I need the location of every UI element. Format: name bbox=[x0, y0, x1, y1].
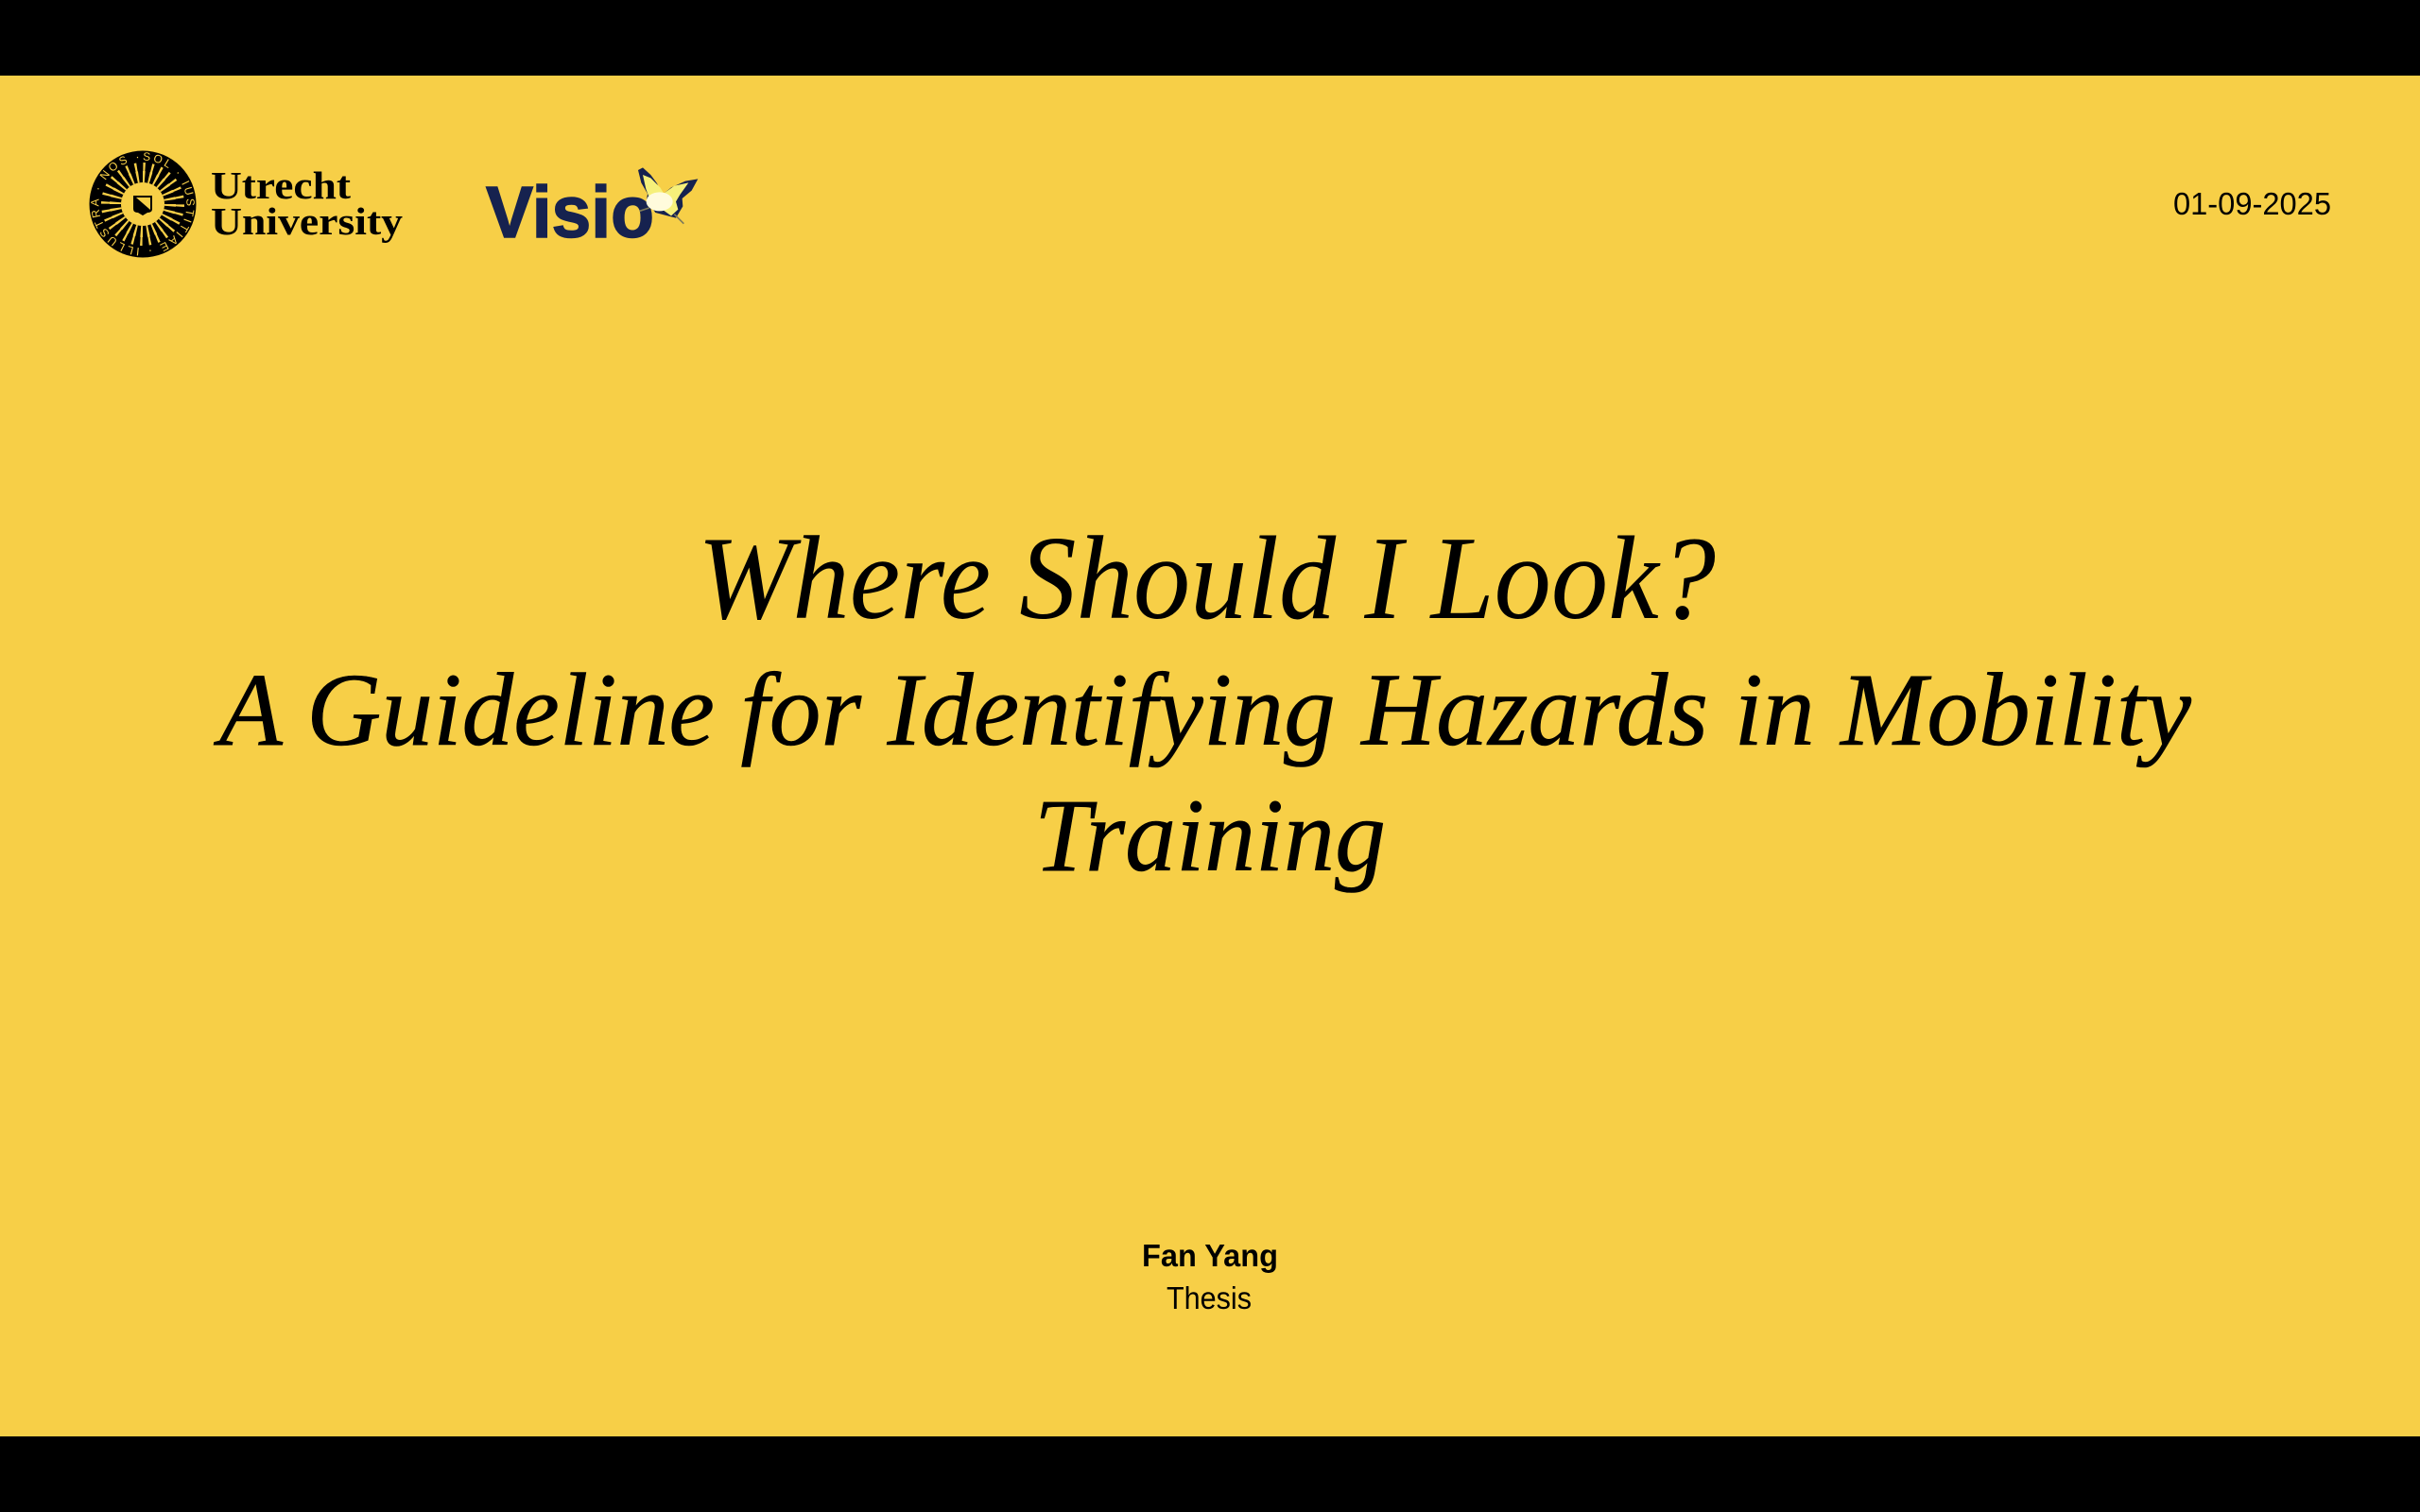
wordmark: Utrecht University bbox=[211, 163, 404, 243]
subtitle: A Guideline for Identifying Hazards in Mobility bbox=[213, 652, 2191, 767]
author block bbox=[1142, 1238, 1278, 1315]
logo: Visio bbox=[486, 167, 698, 253]
title: Where Should I Look? bbox=[698, 513, 1716, 644]
subtitle: Training bbox=[1034, 778, 1386, 893]
logo: Utrecht University bbox=[89, 151, 404, 257]
author block: Fan Yang bbox=[1142, 1238, 1278, 1273]
wordmark: Utrecht University: University bbox=[211, 199, 404, 243]
icon: butterfly bbox=[638, 167, 698, 224]
author block: Thesis bbox=[1167, 1280, 1252, 1315]
wordmark: Visio: Visio bbox=[486, 172, 654, 253]
date: 01-09-2025 bbox=[2173, 186, 2331, 221]
icon: university seal: SOL · IUSTITIAE · ILLUSTRA · NOS · bbox=[91, 152, 195, 255]
wordmark: Utrecht University: Utrecht bbox=[211, 163, 351, 207]
subtitle bbox=[213, 652, 2191, 893]
